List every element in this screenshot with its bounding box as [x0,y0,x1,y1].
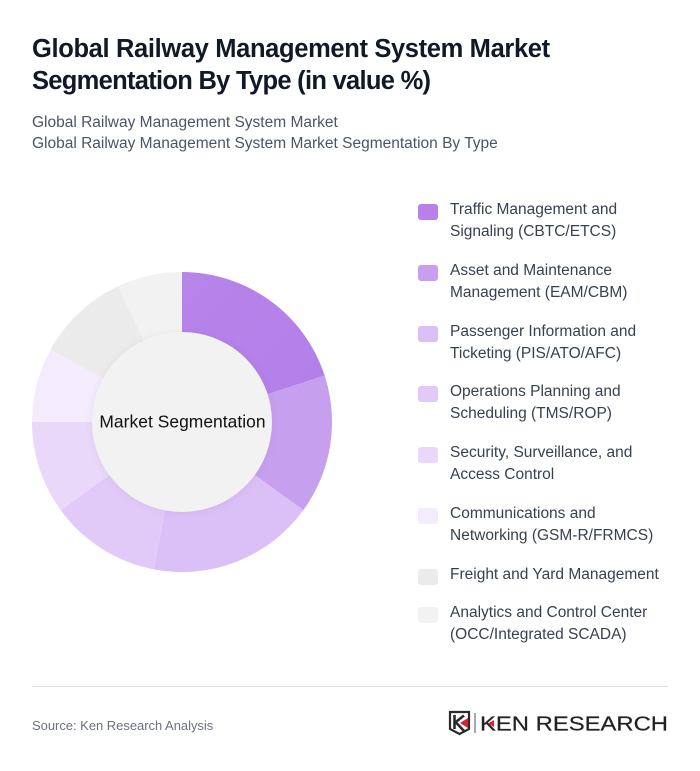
legend item: Analytics [418,604,648,643]
legend: Freight and Yard Management [450,566,659,583]
donut center [92,332,272,512]
legend: Signaling (CBTC/ETCS) [450,223,616,240]
subtitle: Global Railway Management System Market Segmentation By Type [32,135,498,152]
logo: Ken Research [448,710,668,736]
legend: Access Control [450,466,554,483]
title [32,34,550,94]
legend item: Security [418,444,632,483]
segment: Operations Planning and Scheduling [61,422,182,569]
legend item: Passenger Information [418,323,636,362]
legend item: Traffic Management [418,201,617,240]
legend: Asset and Maintenance [450,262,612,279]
title: Segmentation By Type (in value %) [32,66,430,94]
donut chart [32,272,332,572]
subtitle [32,114,498,152]
logo wordmark: KEN RESEARCH [480,714,668,736]
legend item: Communications [418,505,653,544]
subtitle: Global Railway Management System Market [32,114,338,131]
segment: Freight and Yard Management [51,286,182,422]
segment: Asset and Maintenance Management [182,376,332,510]
legend: Security, Surveillance, and [450,444,632,461]
segment: Security, Surveillance, and Access Control [32,422,182,510]
legend item: Freight and Yard [418,566,659,585]
title: Global Railway Management System Market [32,34,550,62]
legend [418,201,659,643]
legend: Scheduling (TMS/ROP) [450,405,612,422]
legend: Traffic Management and [450,201,617,218]
legend item: Operations Planning [418,383,621,422]
segment: Communications and Networking [32,350,182,422]
legend: Communications and [450,505,596,522]
legend: Management (EAM/CBM) [450,284,627,301]
legend: Operations Planning and [450,383,621,400]
segment: Traffic Management and Signaling [182,272,325,422]
logo shield [450,712,469,734]
segment: Analytics and Control Center [118,272,182,422]
source note: Source: Ken Research Analysis [32,718,213,733]
legend: Passenger Information and [450,323,636,340]
legend item: Asset and Maintenance [418,262,627,301]
legend: (OCC/Integrated SCADA) [450,626,627,643]
segment: Passenger Information and Ticketing [154,422,303,572]
center label: Market Segmentation [99,412,266,432]
legend: Ticketing (PIS/ATO/AFC) [450,345,621,362]
legend: Networking (GSM-R/FRMCS) [450,527,653,544]
legend: Analytics and Control Center [450,604,647,621]
